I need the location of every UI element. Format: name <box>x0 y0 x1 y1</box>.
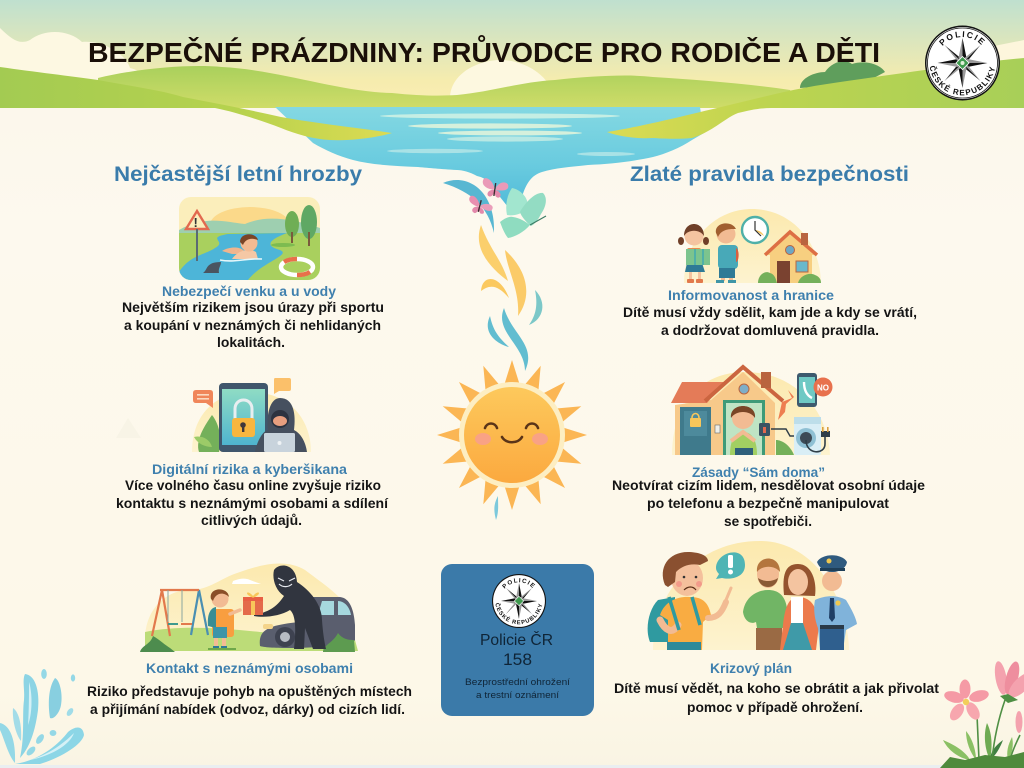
body text: Dítě musí vědět, na koho se obrátit a jak přivolat <box>614 681 940 696</box>
icon: police badge: POLICIE <box>502 578 536 589</box>
icon: boy in doorway, phone and washer <box>671 367 832 455</box>
panel: digital risks <box>116 378 389 528</box>
icon: children, clock and house <box>678 209 821 283</box>
decorative central stream with butterflies <box>443 178 546 520</box>
icon: child pointing to trusted adults <box>648 541 857 650</box>
icon: tablet, lock and hacker <box>192 378 311 452</box>
icon: police badge <box>492 574 546 628</box>
body text: pomoc v případě ohrožení. <box>687 700 863 715</box>
panel: home alone rules <box>612 367 926 529</box>
sun rays <box>437 360 587 510</box>
subheading: Nebezpečí venku a u vody <box>162 284 337 299</box>
emergency number: 158 <box>503 650 532 669</box>
subheading: Kontakt s neznámými osobami <box>146 661 353 676</box>
body text: se spotřebiči. <box>724 514 812 529</box>
heading: right column: Zlaté pravidla bezpečnosti <box>630 163 909 186</box>
heading: left column: Nejčastější letní hrozby <box>114 163 362 186</box>
card note <box>465 677 570 701</box>
panel: awareness and boundaries <box>623 209 917 338</box>
butterfly green <box>500 188 546 238</box>
body text: Dítě musí vždy sdělit, kam jde a kdy se vrátí, <box>623 305 917 320</box>
subheading: Zásady “Sám doma” <box>692 465 825 480</box>
icon: police badge: ČESKÉ REPUBLIKY <box>496 603 542 624</box>
icon: swimmer in river: ! <box>194 215 198 230</box>
body text <box>623 305 917 338</box>
title: BEZPEČNÉ PRÁZDNINY: PRŮVODCE PRO RODIČE A DĚTI <box>88 35 880 68</box>
subheading: Informovanost a hranice <box>668 288 835 303</box>
subheading: Digitální rizika a kyberšikana <box>152 462 348 477</box>
body text: citlivých údajů. <box>201 513 302 528</box>
body text: po telefonu a bezpečně manipulovat <box>647 496 890 511</box>
water splash bottom left <box>0 669 84 764</box>
body text: Riziko představuje pohyb na opuštěných místech <box>87 684 412 699</box>
body text: kontaktu s neznámými osobami a sdílení <box>116 496 389 511</box>
body text: Největším rizikem jsou úrazy při sportu <box>122 300 384 315</box>
butterfly pink lower <box>466 195 494 217</box>
panel: contact with strangers <box>87 564 412 717</box>
panel: police contact card <box>441 564 594 716</box>
body text: a koupání v neznámých či nehlidaných <box>124 318 381 333</box>
body text <box>87 684 412 717</box>
icon: boy in doorway, phone and washer: NO <box>817 384 829 392</box>
landscape header: sky, hills and lake <box>0 0 1024 212</box>
panel: crisis plan <box>614 541 940 715</box>
icon: stranger offering gift <box>140 564 358 652</box>
body text: a dodržovat domluvená pravidla. <box>661 323 879 338</box>
body text: a přijímání nabídek (odvoz, dárky) od cizích lidí. <box>90 702 405 717</box>
butterfly pink top <box>481 178 509 199</box>
card name: Policie ČR <box>480 630 553 649</box>
card note: a trestní oznámení <box>476 690 559 701</box>
body text <box>612 478 926 529</box>
flowers bottom right <box>940 660 1024 768</box>
police logo top right: POLICIE <box>938 31 985 46</box>
icon: swimmer in river <box>179 197 320 280</box>
body text <box>122 300 384 350</box>
body text: lokalitách. <box>217 335 285 350</box>
card note: Bezprostřední ohrožení <box>465 677 570 688</box>
sun illustration <box>437 360 587 510</box>
subheading: Krizový plán <box>710 661 792 676</box>
panel: water danger <box>122 197 384 350</box>
police logo top right: ČESKÉ REPUBLIKY <box>930 66 995 96</box>
body text <box>116 478 389 528</box>
body text: Více volného času online zvyšuje riziko <box>125 478 381 493</box>
body text: Neotvírat cizím lidem, nesdělovat osobní údaje <box>612 478 926 493</box>
police logo top right <box>925 26 1000 100</box>
body text <box>614 681 940 715</box>
swooshes <box>443 180 542 520</box>
